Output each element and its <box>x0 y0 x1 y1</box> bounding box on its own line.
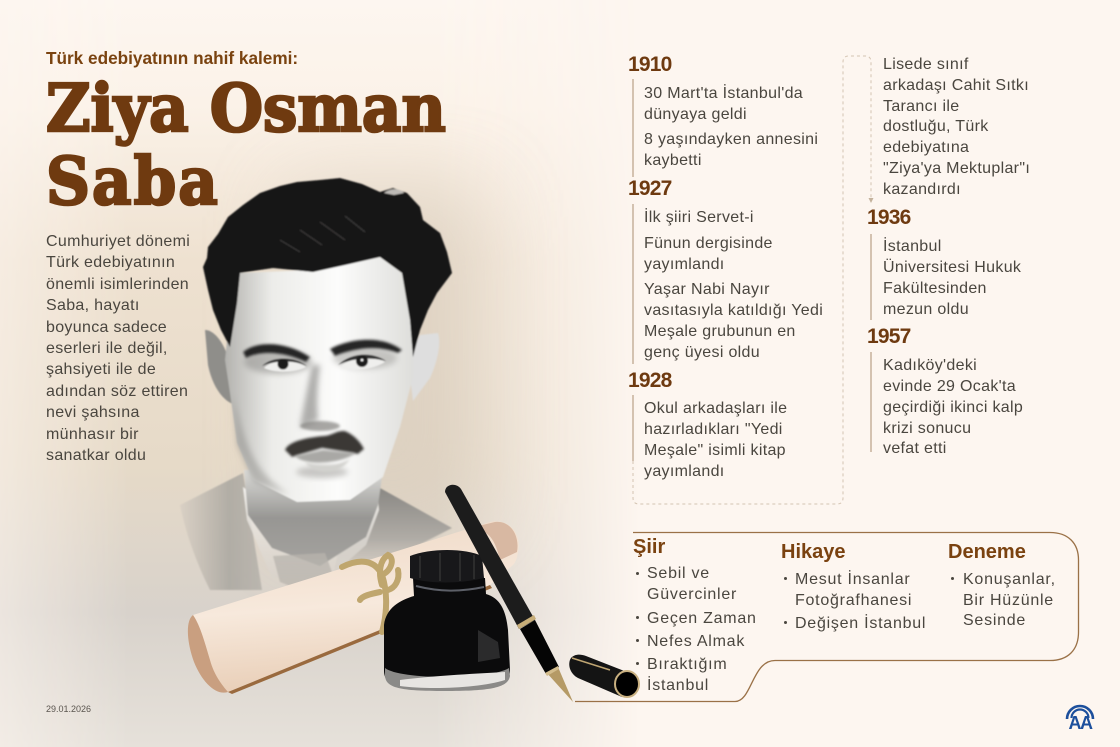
works: Şiir: Şiir <box>633 536 665 558</box>
timeline continued text: arkadaşı Cahit Sıtkı <box>883 77 1029 94</box>
timeline continued text: dostluğu, Türk <box>883 118 989 135</box>
timeline 1957: Kadıköy'deki <box>883 357 977 374</box>
section <box>520 620 559 674</box>
timeline 1957: geçirdiği ikinci kalp <box>883 399 1023 416</box>
timeline 1936: mezun oldu <box>883 301 969 318</box>
works: Şiir: Bıraktığım <box>647 656 727 673</box>
timeline 1910: 8 yaşındayken annesini <box>644 131 818 148</box>
neck highlight <box>416 586 484 591</box>
works: Deneme: Bir Hüzünle <box>963 592 1054 609</box>
works: Şiir <box>633 536 757 694</box>
works: Deneme: Sesinde <box>963 612 1026 629</box>
timeline 1936 <box>867 206 1021 318</box>
intro paragraph: boyunca sadece <box>46 319 167 336</box>
face <box>225 257 413 502</box>
nib <box>546 667 573 702</box>
jacket <box>180 473 262 590</box>
cap <box>410 550 484 582</box>
background tone <box>0 102 597 747</box>
timeline 1928 <box>628 369 787 480</box>
timeline 1910: 1910 <box>628 53 672 76</box>
bottle body <box>384 578 510 690</box>
intro paragraph: Saba, hayatı <box>46 297 140 314</box>
timeline 1927: genç üyesi oldu <box>644 344 760 361</box>
barrel <box>445 485 535 629</box>
works: Şiir: Nefes Almak <box>647 633 745 650</box>
intro paragraph: şahsiyeti ile de <box>46 361 156 378</box>
timeline 1927: İlk şiiri Servet-i <box>644 209 754 226</box>
ring <box>517 615 536 629</box>
timeline 1957: vefat etti <box>883 440 947 457</box>
title <box>46 70 446 220</box>
timeline 1927: Meşale grubunun en <box>644 323 796 340</box>
timeline 1936: 1936 <box>867 206 911 229</box>
eyes <box>262 355 386 372</box>
works: Şiir: İstanbul <box>647 677 709 694</box>
timeline 1927: Yaşar Nabi Nayır <box>644 281 770 298</box>
timeline 1936: İstanbul <box>883 238 942 255</box>
timeline continued text: edebiyatına <box>883 139 969 156</box>
timeline 1928: 1928 <box>628 369 672 392</box>
ears <box>205 330 233 404</box>
intro paragraph <box>46 233 190 464</box>
tie knot <box>273 553 332 590</box>
works: Deneme: Konuşanlar, <box>963 571 1056 588</box>
ink bottle <box>384 550 510 691</box>
timeline continued text <box>883 56 1030 198</box>
timeline 1957: evinde 29 Ocak'ta <box>883 378 1016 395</box>
intro paragraph: eserleri ile değil, <box>46 340 168 357</box>
timeline 1927: vasıtasıyla katıldığı Yedi <box>644 302 823 319</box>
intro paragraph: sanatkar oldu <box>46 447 146 464</box>
works: Şiir: Geçen Zaman <box>647 610 757 627</box>
timeline 1910 <box>628 53 818 169</box>
timeline 1957: krizi sonucu <box>883 420 971 437</box>
face shadows <box>233 347 397 495</box>
intro paragraph: adından söz ettiren <box>46 383 188 400</box>
portrait <box>180 178 452 590</box>
timeline 1928: Meşale" isimli kitap <box>644 442 786 459</box>
highlight <box>478 630 500 662</box>
timeline 1910: 30 Mart'ta İstanbul'da <box>644 85 803 102</box>
works: Hikaye: Hikaye <box>781 541 846 563</box>
fountain pen <box>445 485 573 702</box>
intro paragraph: önemli isimlerinden <box>46 276 189 293</box>
scroll end <box>188 615 228 693</box>
intro paragraph: Türk edebiyatının <box>46 254 175 271</box>
timeline continued text: Tarancı ile <box>883 98 959 115</box>
date: 29.01.2026 <box>46 704 91 714</box>
works panel outline <box>575 532 1078 702</box>
works: Hikaye: Fotoğrafhanesi <box>795 592 912 609</box>
timeline 1936: Fakültesinden <box>883 280 987 297</box>
works: Şiir: Güvercinler <box>647 586 737 603</box>
hair <box>203 178 452 357</box>
timeline 1957 <box>867 325 1023 457</box>
lips <box>295 450 355 463</box>
works: Hikaye <box>781 541 926 632</box>
timeline 1927: 1927 <box>628 177 672 200</box>
timeline 1927 <box>628 177 823 361</box>
works: Hikaye: Mesut İnsanlar <box>795 571 910 588</box>
rope <box>342 555 398 632</box>
timeline 1928: yayımlandı <box>644 463 725 480</box>
works: Deneme: Deneme <box>948 541 1026 563</box>
timeline continued text: kazandırdı <box>883 181 961 198</box>
pen cap <box>569 655 639 697</box>
eyebrows <box>243 344 310 362</box>
intro paragraph: nevi şahsına <box>46 404 140 421</box>
title: Saba <box>46 143 220 220</box>
scroll body <box>193 521 519 692</box>
glass base <box>385 668 510 691</box>
timeline 1928: Okul arkadaşları ile <box>644 400 787 417</box>
works: Hikaye: Değişen İstanbul <box>795 615 926 632</box>
timeline continued text: "Ziya'ya Mektuplar"ı <box>883 160 1030 177</box>
intro paragraph: Cumhuriyet dönemi <box>46 233 190 250</box>
hair highlights <box>280 216 365 252</box>
neck <box>244 470 383 566</box>
timeline connector <box>633 56 874 504</box>
timeline 1927: yayımlandı <box>644 256 725 273</box>
works: Şiir: Sebil ve <box>647 565 710 582</box>
timeline 1936: Üniversitesi Hukuk <box>883 259 1021 276</box>
timeline continued text: Lisede sınıf <box>883 56 969 73</box>
scroll <box>188 521 519 694</box>
timeline 1910: dünyaya geldi <box>644 106 747 123</box>
shirt <box>243 487 379 578</box>
works: Deneme <box>948 541 1056 629</box>
subtitle: Türk edebiyatının nahif kalemi: <box>46 48 298 68</box>
icon: AA logo <box>1066 704 1094 731</box>
timeline 1957: 1957 <box>867 325 911 348</box>
intro paragraph: münhasır bir <box>46 426 139 443</box>
timeline 1910: kaybetti <box>644 152 702 169</box>
timeline 1927: Fünun dergisinde <box>644 235 773 252</box>
title: Ziya Osman <box>46 70 446 147</box>
timeline 1928: hazırladıkları "Yedi <box>644 421 783 438</box>
moustache <box>285 431 364 457</box>
